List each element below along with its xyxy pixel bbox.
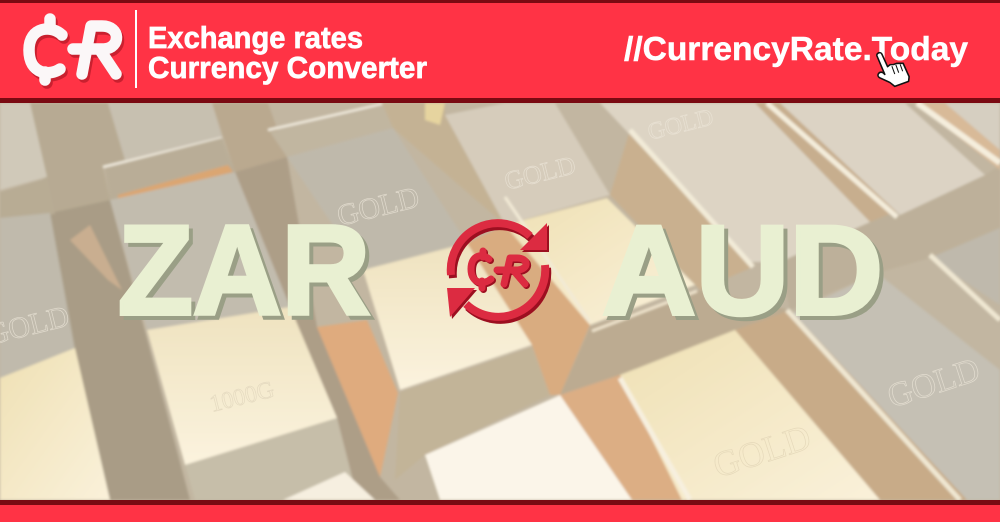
long taupe bars: [600, 103, 870, 262]
gutters: [30, 103, 125, 213]
embossed bar lettering: GOLD: [501, 150, 579, 196]
footer band: [0, 500, 1000, 522]
currency code: AUD: AUD: [602, 199, 883, 341]
embossed bar lettering: GOLD: [883, 351, 984, 416]
top header band: [0, 0, 1000, 103]
currency code: ZAR: ZAR: [122, 203, 374, 345]
icon: currency exchange arrows: [447, 223, 549, 320]
third bar upper: [268, 104, 382, 130]
logo divider: [135, 10, 137, 88]
embossed bar lettering: GOLD: [708, 417, 816, 486]
icon: pointing hand cursor: [871, 46, 911, 91]
icon: CR mark: [471, 251, 528, 290]
far-left upper bar: [0, 103, 47, 190]
logo: CR mark: [29, 19, 119, 83]
second bar face: [110, 172, 290, 330]
currency code: AUD: AUD: [606, 203, 887, 345]
fourth bar: [445, 103, 610, 225]
embossed bar lettering: GOLD: [645, 104, 716, 146]
heading: currency converter: Currency Converter: [148, 50, 427, 85]
background: gold bars photo: [0, 103, 1000, 500]
second bar cap: [108, 103, 222, 160]
bottom bars: [425, 395, 632, 500]
far-left lower bar: [0, 213, 75, 378]
embossed bar lettering: 1000G: [207, 377, 277, 418]
embossed bar lettering: [0, 104, 984, 486]
currency code: ZAR: ZAR: [118, 199, 370, 341]
site url: //CurrencyRate.Today: [624, 30, 969, 67]
heading: exchange rates: Exchange rates: [148, 20, 363, 55]
right dark bars: [793, 273, 1000, 500]
embossed bar lettering: GOLD: [334, 181, 423, 233]
